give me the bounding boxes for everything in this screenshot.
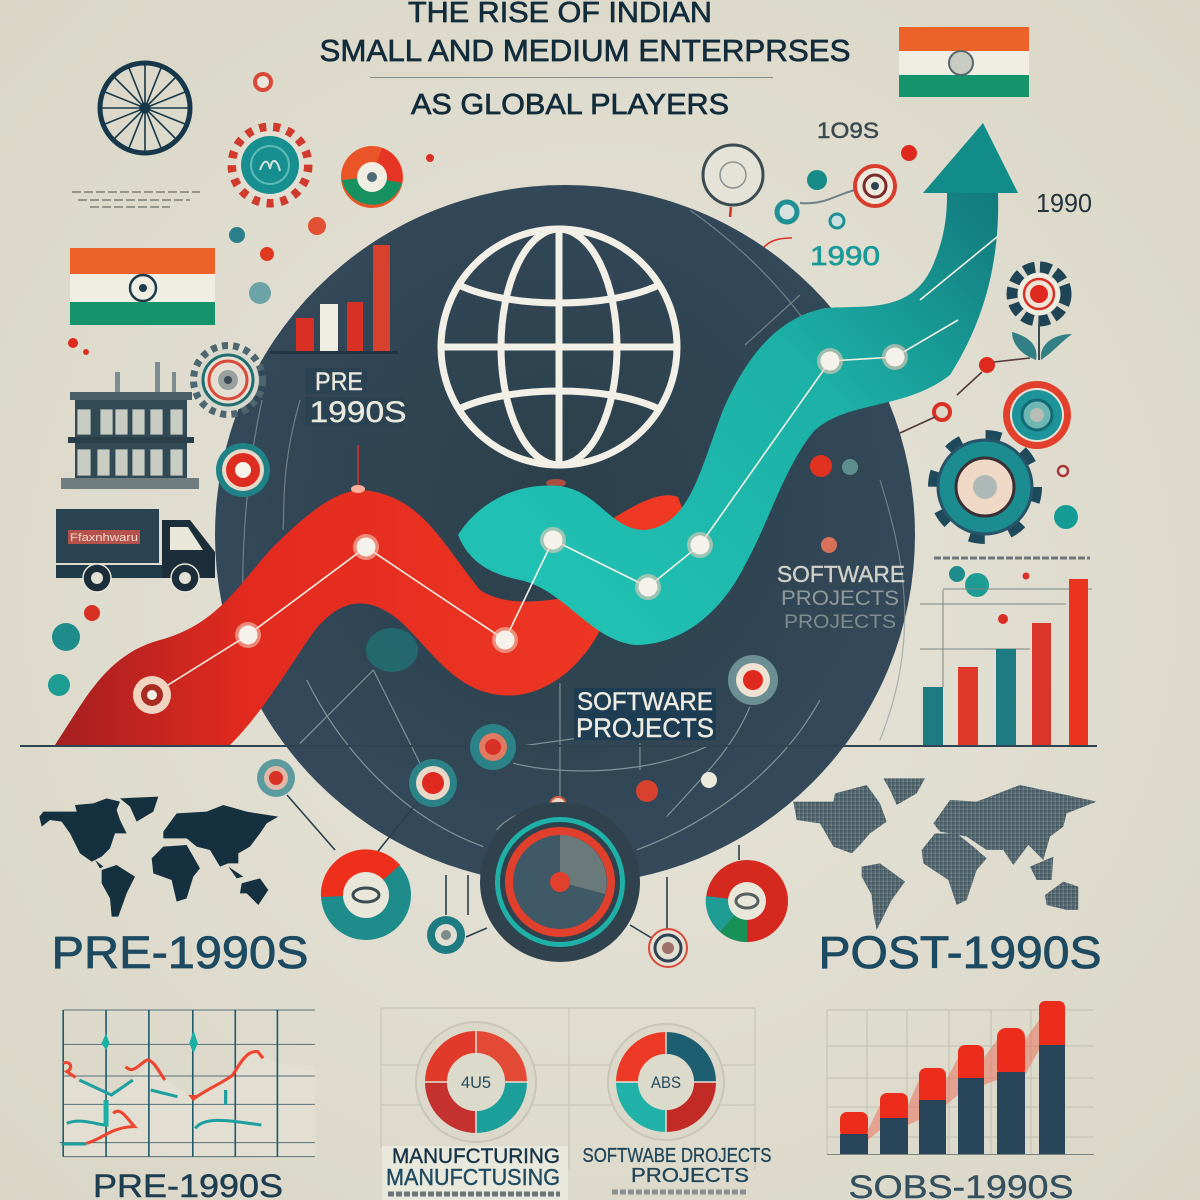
dark circle <box>215 185 915 885</box>
software caption <box>582 1145 772 1192</box>
baseline <box>20 745 1097 747</box>
donut chart left: 4U5 <box>461 1073 491 1092</box>
small bar chart inside circle <box>270 245 398 354</box>
icon: Indian flag top right <box>899 27 1029 97</box>
label software projects centre: PROJECTS <box>576 713 714 743</box>
icon: gear right <box>935 437 1035 537</box>
label pre 1990s <box>305 368 406 429</box>
donut chart left <box>416 1022 536 1142</box>
world map left <box>39 797 278 917</box>
bar chart right <box>920 579 1092 745</box>
donut chart right: ABS <box>651 1073 681 1092</box>
label software projects right: PROJECTS <box>784 612 896 633</box>
world map right <box>793 778 1097 930</box>
icon: gear top <box>232 127 308 203</box>
network lines <box>287 795 739 940</box>
manufacturing caption: MANUFCTUSING <box>386 1164 560 1190</box>
software caption: SOFTWABE DROJECTS <box>582 1145 772 1167</box>
bar chart bottom right <box>827 1001 1094 1155</box>
icon: target right <box>1003 381 1071 449</box>
icon: central dial <box>480 802 640 962</box>
software caption: PROJECTS <box>631 1165 749 1187</box>
label software projects right: SOFTWARE <box>777 561 905 587</box>
manufacturing caption: MANUFCTURING <box>392 1145 560 1168</box>
icon: ring top centre <box>703 145 763 217</box>
label 1990 right: 1990 <box>1036 188 1092 218</box>
marker dots in circle <box>810 455 858 553</box>
icon nodes <box>257 655 778 967</box>
icon: small ring top <box>255 74 271 90</box>
teal growth arrow <box>458 123 1018 645</box>
red growth ribbon <box>55 490 690 745</box>
title <box>320 0 850 121</box>
icon: flower right <box>1012 267 1072 360</box>
icon: Ashoka wheel <box>100 63 190 153</box>
icon: truck <box>56 509 215 592</box>
panel divider lines <box>381 1008 755 1170</box>
donut chart right <box>608 1024 724 1140</box>
label pre 1990s: 1990S <box>310 396 406 429</box>
label 1090s: 1O9S <box>817 118 879 143</box>
label software projects centre <box>574 688 716 743</box>
data line with markers <box>133 237 997 714</box>
icon: pie lower left <box>321 849 411 940</box>
line chart bottom left <box>60 1010 315 1157</box>
label software projects right: PROJECTS <box>781 587 899 610</box>
title: SMALL AND MEDIUM ENTERPRSES <box>320 33 850 68</box>
icon: building <box>61 362 199 489</box>
scattered icons top <box>48 145 1078 696</box>
orbit lines <box>300 670 820 850</box>
label software projects right <box>777 561 905 633</box>
manufacturing caption <box>382 1145 568 1200</box>
label 1990 teal: 1990 <box>810 241 880 271</box>
title: AS GLOBAL PLAYERS <box>411 89 729 121</box>
glow on red crest <box>351 445 566 493</box>
small text block left <box>72 192 200 207</box>
icon: pie lower right <box>706 860 788 942</box>
icon: Indian flag left <box>70 248 215 325</box>
icon: truck: Ffaxnhwaru <box>70 532 138 544</box>
small icons above bar chart <box>934 558 1090 624</box>
globe icon <box>441 229 677 465</box>
icon: pie top <box>341 146 403 208</box>
heading pre-1990s: PRE-1990S <box>52 927 308 978</box>
heading post-1990s: POST-1990S <box>818 927 1102 978</box>
upper orbit lines <box>243 210 905 740</box>
icon: target left <box>216 443 270 497</box>
label pre 1990s: PRE <box>315 368 363 396</box>
teal glow blob <box>366 628 418 672</box>
label software projects centre: SOFTWARE <box>577 688 713 716</box>
icon: gear left <box>194 346 262 414</box>
